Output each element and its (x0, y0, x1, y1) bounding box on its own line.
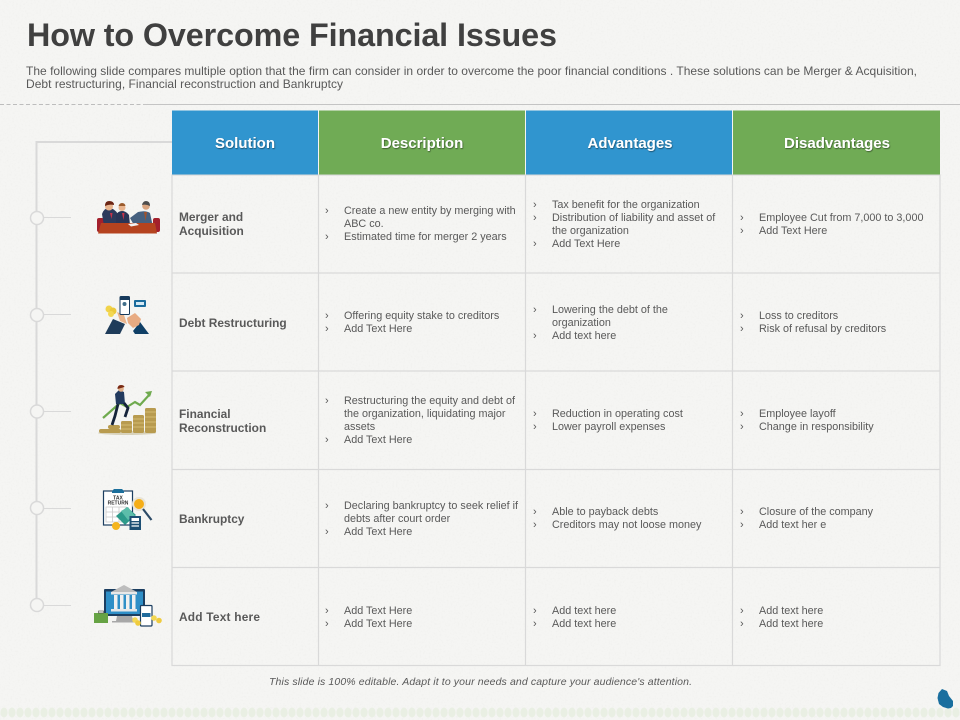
row 4: bankruptcy: Bankruptcy (179, 512, 245, 526)
row 1: merger and acquisition: Distribution of liability and asset of (552, 212, 716, 224)
row 5: add text here: Add text here (759, 618, 823, 630)
row 5: add text here: › (325, 605, 329, 617)
row 3: financial reconstruction: Restructuring the equity and debt of (344, 395, 516, 407)
row 1: merger and acquisition: Tax benefit for the organization (552, 199, 700, 211)
row 3: financial reconstruction (179, 395, 874, 446)
row 4: bankruptcy: Able to payback debts (552, 506, 659, 518)
row 4: bankruptcy: › (325, 500, 329, 512)
row 5: add text here: Add Text Here (344, 605, 412, 617)
row 3: financial reconstruction: › (740, 421, 744, 433)
row 3: financial reconstruction: Employee layoff (759, 408, 837, 420)
row 3: financial reconstruction: Reconstruction (179, 421, 266, 435)
intro text: The following slide compares multiple option that the firm can consider in order to overcome the poor financial conditions . These solutions can be Merger & Acquisition, (26, 64, 917, 78)
row 2: debt restructuring: › (740, 323, 744, 335)
icon: financial growth (98, 385, 156, 435)
row 2: debt restructuring: › (740, 310, 744, 322)
row 1: merger and acquisition: the organization (552, 225, 629, 237)
row 1: merger and acquisition: › (533, 212, 537, 224)
row 3: financial reconstruction: Change in responsibility (759, 421, 874, 433)
row 5: add text here: Add Text here (179, 610, 260, 624)
row 4: bankruptcy: Declaring bankruptcy to seek relief if (344, 500, 519, 512)
icon: business meeting (97, 201, 160, 234)
row 5: add text here: Add text here (552, 618, 616, 630)
icon: tax return: TAX (113, 496, 123, 502)
row 5: add text here (179, 605, 823, 630)
row 2: debt restructuring: › (533, 330, 537, 342)
row 3: financial reconstruction: › (325, 434, 329, 446)
icon: tax return (104, 489, 152, 530)
row 2: debt restructuring: Add Text Here (344, 323, 412, 335)
row 1: merger and acquisition: Acquisition (179, 224, 244, 238)
row 5: add text here: › (740, 605, 744, 617)
row 4: bankruptcy: › (740, 506, 744, 518)
row 3: financial reconstruction: › (533, 421, 537, 433)
row 3: financial reconstruction: › (325, 395, 329, 407)
timeline connector (30, 142, 172, 612)
row 4: bankruptcy: Closure of the company (759, 506, 874, 518)
row 1: merger and acquisition: ABC co. (344, 218, 384, 230)
row 2: debt restructuring: › (325, 323, 329, 335)
row 1: merger and acquisition: Estimated time for merger 2 years (344, 231, 507, 243)
row 5: add text here: › (533, 618, 537, 630)
table grid (172, 175, 940, 666)
row 1: merger and acquisition: Create a new entity by merging with (344, 205, 516, 217)
row 5: add text here: Add text here (759, 605, 823, 617)
row 4: bankruptcy: › (740, 519, 744, 531)
row 4: bankruptcy: Add Text Here (344, 526, 412, 538)
row 1: merger and acquisition: Add Text Here (552, 238, 620, 250)
row 2: debt restructuring: Loss to creditors (759, 310, 839, 322)
icon: online bank (94, 585, 162, 626)
row 5: add text here: › (533, 605, 537, 617)
row 5: add text here: Add text here (552, 605, 616, 617)
row 3: financial reconstruction: Lower payroll expenses (552, 421, 666, 433)
row 3: financial reconstruction: › (533, 408, 537, 420)
icon: tax return: RETURN (108, 500, 129, 506)
row 4: bankruptcy (179, 500, 874, 538)
row 2: debt restructuring: Risk of refusal by creditors (759, 323, 887, 335)
table header: Advantages (587, 135, 673, 152)
row 3: financial reconstruction: the organization, liquidating major (344, 408, 506, 420)
table header (172, 110, 940, 174)
table header: Description (381, 135, 463, 152)
icon: debt restructuring hands (105, 296, 149, 334)
row 4: bankruptcy: › (533, 519, 537, 531)
row 3: financial reconstruction: Reduction in operating cost (552, 408, 683, 420)
table header: Disadvantages (784, 135, 890, 152)
title: How to Overcome Financial Issues (27, 17, 557, 53)
row 1: merger and acquisition: › (325, 231, 329, 243)
row 3: financial reconstruction: assets (344, 421, 376, 433)
row 1: merger and acquisition: › (533, 199, 537, 211)
row 5: add text here: › (325, 618, 329, 630)
row 1: merger and acquisition: › (740, 225, 744, 237)
row 1: merger and acquisition: › (325, 205, 329, 217)
row 4: bankruptcy: Add text her e (759, 519, 826, 531)
row 2: debt restructuring (179, 304, 887, 342)
row 2: debt restructuring: Debt Restructuring (179, 316, 287, 330)
row 5: add text here: › (740, 618, 744, 630)
row 1: merger and acquisition: Merger and (179, 210, 243, 224)
row 2: debt restructuring: organization (552, 317, 611, 329)
row 1: merger and acquisition: › (533, 238, 537, 250)
table header: Solution (215, 135, 275, 152)
row 3: financial reconstruction: Add Text Here (344, 434, 412, 446)
row 1: merger and acquisition: Employee Cut from 7,000 to 3,000 (759, 212, 923, 224)
row 2: debt restructuring: Add text here (552, 330, 616, 342)
row 4: bankruptcy: › (533, 506, 537, 518)
row 3: financial reconstruction: › (740, 408, 744, 420)
row 2: debt restructuring: Lowering the debt of the (552, 304, 668, 316)
intro text: Debt restructuring, Financial reconstruction and Bankruptcy (26, 77, 343, 91)
row 4: bankruptcy: › (325, 526, 329, 538)
row 1: merger and acquisition (179, 199, 923, 250)
row 3: financial reconstruction: Financial (179, 407, 231, 421)
row 1: merger and acquisition: › (740, 212, 744, 224)
logo mark (938, 689, 953, 708)
row 2: debt restructuring: › (533, 304, 537, 316)
row 4: bankruptcy: debts after court order (344, 513, 451, 525)
row 2: debt restructuring: › (325, 310, 329, 322)
row 2: debt restructuring: Offering equity stake to creditors (344, 310, 500, 322)
row 1: merger and acquisition: Add Text Here (759, 225, 827, 237)
intro text (26, 64, 917, 91)
row 5: add text here: Add Text Here (344, 618, 412, 630)
footer note: This slide is 100% editable. Adapt it to your needs and capture your audience's attention. (269, 676, 692, 688)
row 4: bankruptcy: Creditors may not loose money (552, 519, 702, 531)
